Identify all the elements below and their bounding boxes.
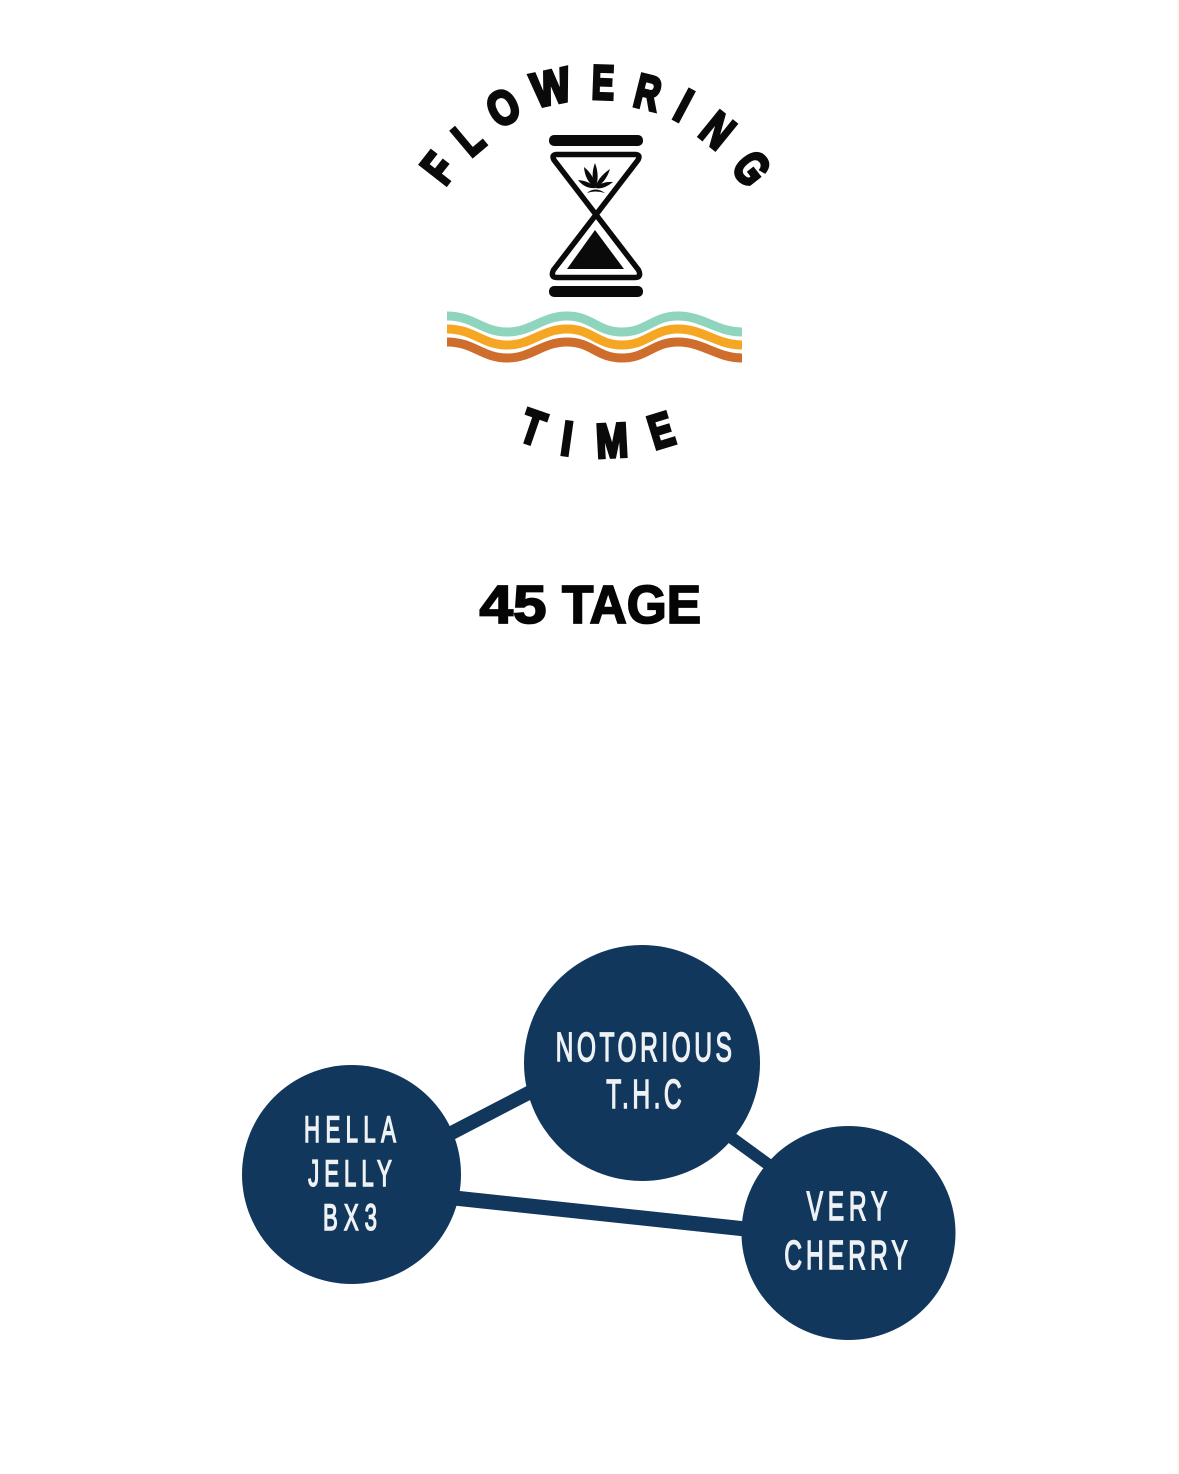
logo heading: TIME: M (595, 414, 629, 469)
node: Notorious T.H.C: T.H.C (606, 1072, 685, 1118)
logo heading: FLOWERING (411, 55, 781, 196)
node: Notorious T.H.C: NOTORIOUS (556, 1025, 735, 1071)
node: Notorious T.H.C (524, 945, 760, 1181)
decorative waves (447, 316, 742, 358)
logo heading: FLOWERING: N (690, 102, 744, 160)
node: Very Cherry: CHERRY (784, 1233, 912, 1279)
node: Hella Jelly BX3 (242, 1065, 461, 1284)
logo heading: FLOWERING: G (722, 141, 781, 196)
logo heading: FLOWERING: W (527, 57, 576, 118)
node: Hella Jelly BX3: JELLY (308, 1153, 397, 1194)
logo heading: TIME: E (642, 401, 680, 460)
logo heading: FLOWERING: O (478, 78, 529, 139)
connector: Notorious THC to Very Cherry (725, 1133, 780, 1173)
connector: Hella Jelly to Notorious THC (440, 1087, 540, 1139)
logo heading: FLOWERING: R (629, 63, 667, 122)
logo heading: FLOWERING: I (666, 80, 700, 132)
node: Hella Jelly BX3: BX3 (323, 1197, 383, 1238)
logo heading: TIME (513, 399, 680, 469)
node: Very Cherry (742, 1126, 956, 1340)
logo: flowering time (411, 55, 781, 469)
icon: hourglass (549, 135, 643, 297)
logo heading: FLOWERING: F (411, 143, 466, 193)
logo heading: FLOWERING: L (443, 111, 494, 166)
icon: cannabis leaf (578, 163, 613, 193)
node: Very Cherry: VERY (807, 1184, 892, 1230)
logo heading: TIME: T (513, 399, 552, 457)
connector: Hella Jelly to Very Cherry (445, 1197, 755, 1230)
node: Hella Jelly BX3: HELLA (304, 1109, 401, 1150)
heading: flowering duration (480, 575, 701, 635)
heading: flowering duration: 45 (480, 575, 546, 635)
logo heading: FLOWERING: E (591, 55, 615, 110)
heading: flowering duration: TAGE (562, 575, 701, 635)
diagram: genetics lineage (242, 945, 956, 1340)
logo heading: TIME: I (558, 413, 576, 467)
